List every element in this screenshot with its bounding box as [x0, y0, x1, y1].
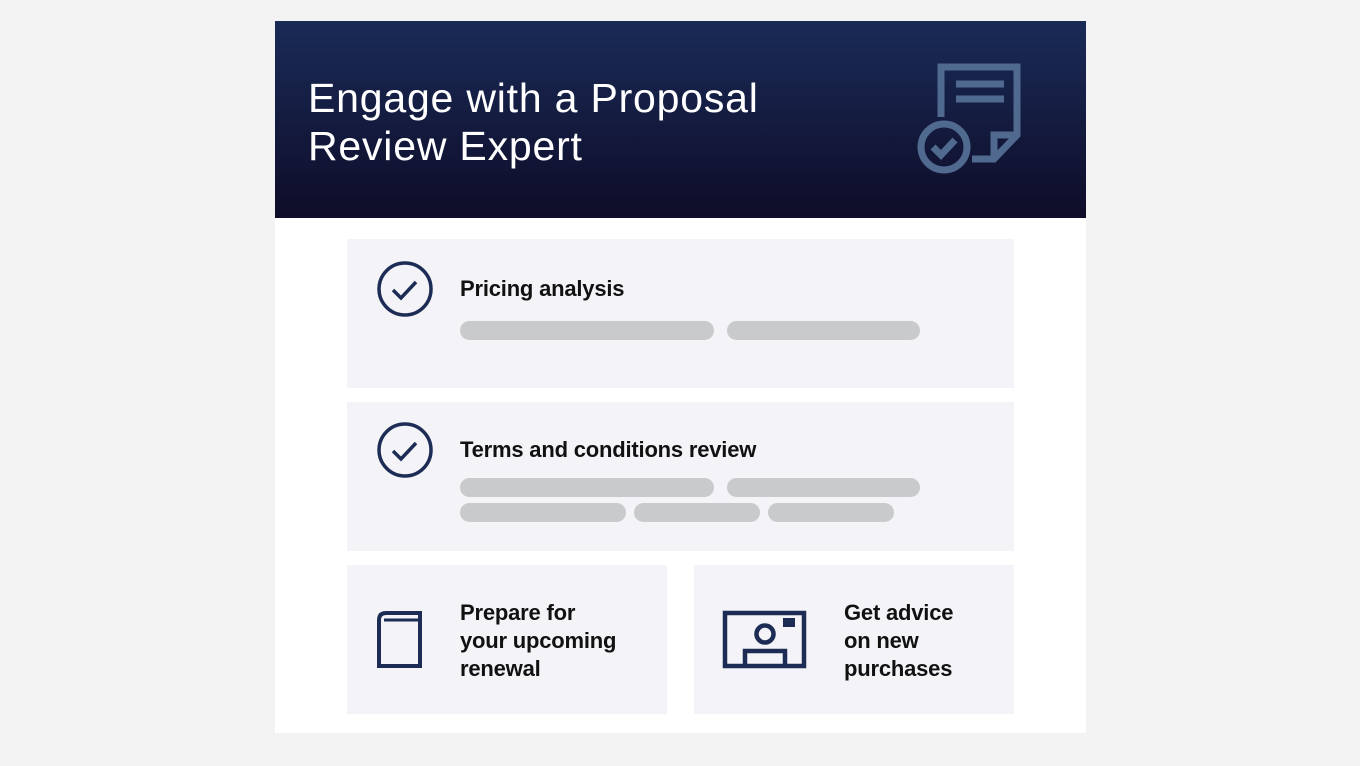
panel: renewal	[347, 565, 667, 714]
panel: new purchases	[694, 565, 1014, 714]
icon: check circle	[377, 261, 433, 317]
panel: terms and conditions	[347, 402, 1014, 551]
card	[275, 21, 1086, 733]
icon: book	[377, 611, 422, 668]
icon: document with check	[918, 64, 1020, 174]
text placeholders	[460, 321, 920, 340]
header	[275, 21, 1086, 218]
title	[308, 75, 759, 169]
text	[460, 600, 616, 681]
text: Get advice	[844, 600, 953, 625]
icon: check circle	[377, 422, 433, 478]
text: Prepare for	[460, 600, 575, 625]
text placeholders	[460, 478, 920, 522]
heading: Pricing analysis	[460, 276, 624, 301]
panel: pricing analysis	[347, 239, 1014, 388]
text: your upcoming	[460, 628, 616, 653]
heading: Terms and conditions review	[460, 437, 756, 462]
text: renewal	[460, 656, 541, 681]
text: on new	[844, 628, 919, 653]
title: Engage with a Proposal	[308, 75, 759, 121]
icon: picture card	[722, 610, 806, 668]
text	[844, 600, 953, 681]
title: Review Expert	[308, 123, 583, 169]
text: purchases	[844, 656, 952, 681]
